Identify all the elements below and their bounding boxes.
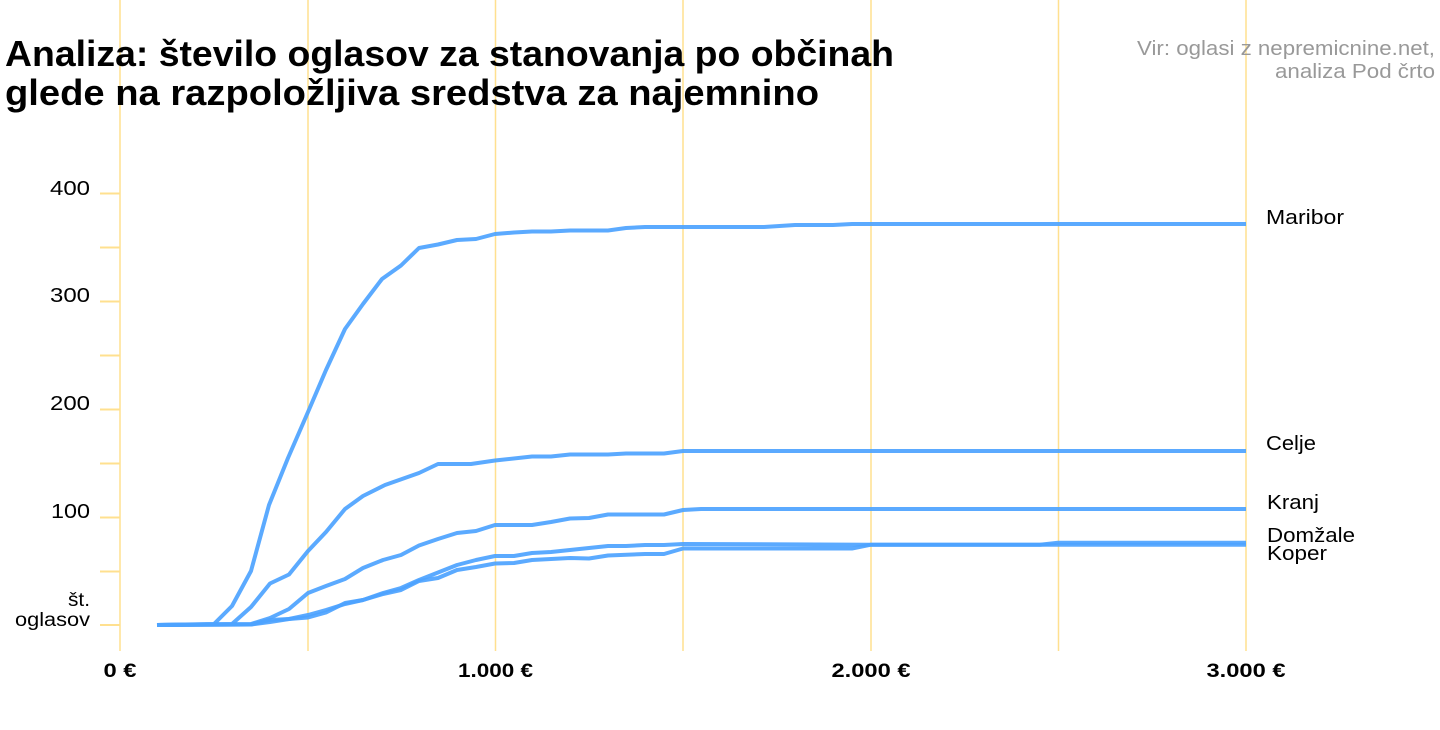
x axis labels: 0 € xyxy=(104,661,137,682)
line: Kranj xyxy=(157,509,1246,625)
line: Domžale xyxy=(157,543,1246,625)
y axis labels: št. xyxy=(68,590,90,611)
data lines xyxy=(157,224,1246,625)
source note: Vir: oglasi z nepremicnine.net, xyxy=(1137,38,1435,60)
x axis labels: 3.000 € xyxy=(1206,661,1286,682)
x axis labels xyxy=(104,661,1286,682)
series labels: Kranj xyxy=(1267,492,1319,514)
line: Koper xyxy=(157,545,1246,625)
series labels: Koper xyxy=(1267,543,1327,565)
title: glede na razpoložljiva sredstva za najemnino xyxy=(5,72,819,113)
source note xyxy=(1137,38,1435,83)
y axis labels: 100 xyxy=(51,501,90,523)
y axis labels: 200 xyxy=(50,393,90,415)
series labels: Maribor xyxy=(1266,207,1344,229)
y axis labels xyxy=(15,178,91,631)
line: Maribor xyxy=(157,224,1246,625)
x axis labels: 1.000 € xyxy=(458,661,533,682)
y axis labels: oglasov xyxy=(15,610,91,631)
title: Analiza: število oglasov za stanovanja po občinah xyxy=(5,33,894,74)
title xyxy=(5,33,894,113)
y axis labels: 400 xyxy=(50,178,90,200)
line: Celje xyxy=(157,451,1246,625)
x axis labels: 2.000 € xyxy=(832,661,911,682)
series labels: Celje xyxy=(1266,433,1316,455)
source note: analiza Pod črto xyxy=(1275,61,1435,83)
series labels xyxy=(1266,207,1355,565)
y axis labels: 300 xyxy=(50,285,90,307)
series labels: Domžale xyxy=(1267,525,1355,547)
